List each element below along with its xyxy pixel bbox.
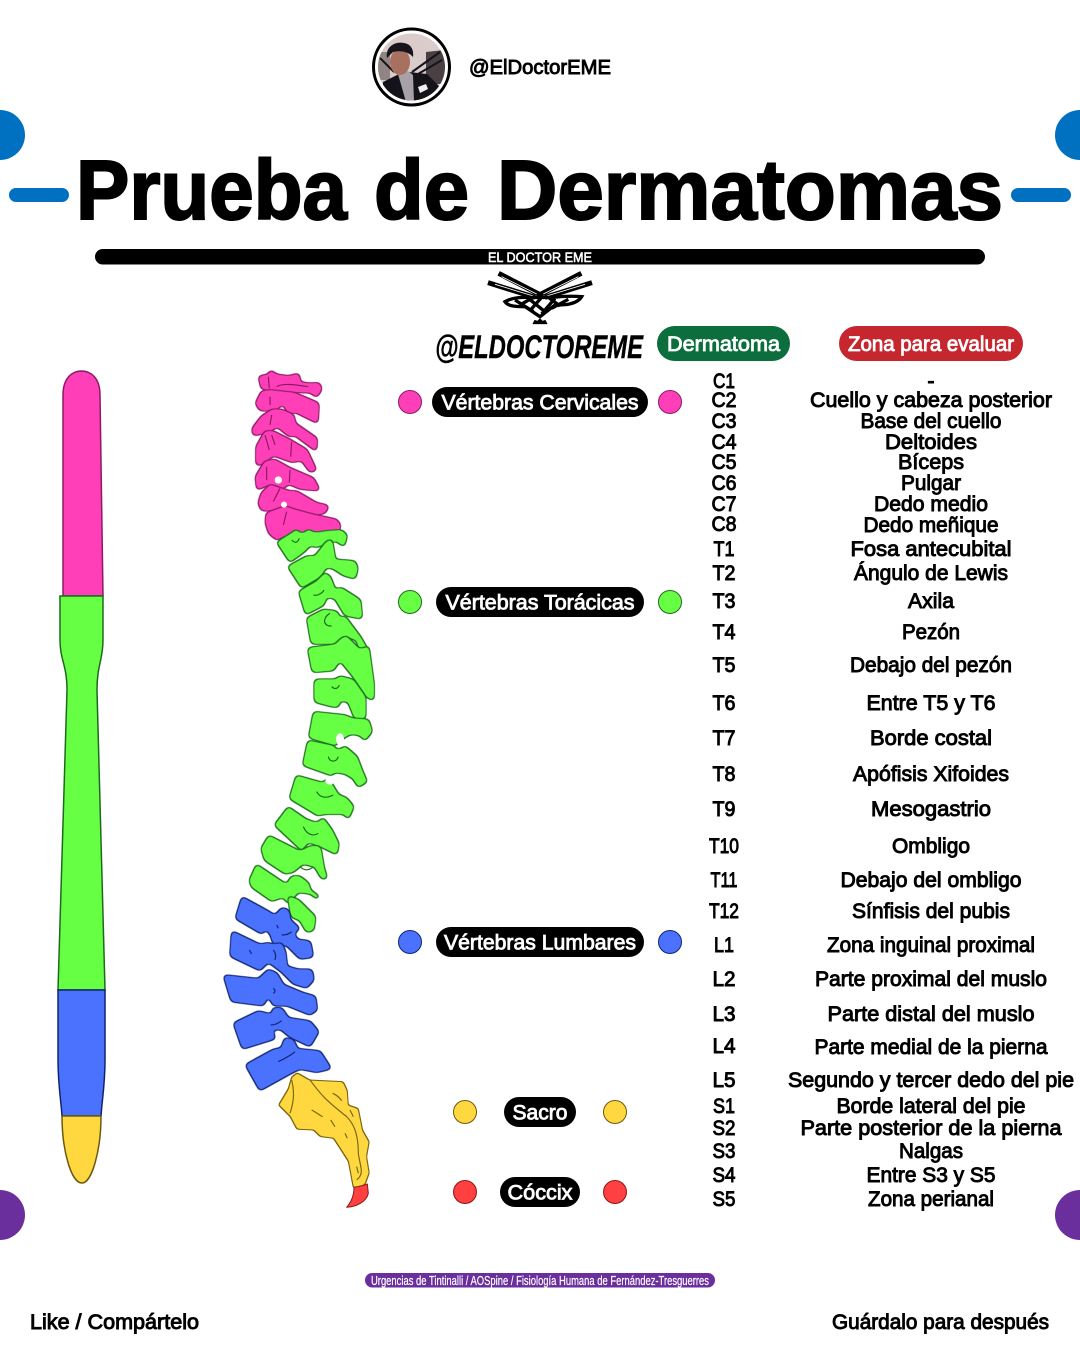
spine illustration (224, 371, 373, 1207)
dermatome levels column: T11 (710, 868, 738, 892)
dermatome levels column: T6 (712, 691, 736, 715)
dermatome levels column (709, 369, 739, 1211)
dermatome levels column: L2 (712, 967, 736, 991)
zones to evaluate column: Parte medial de la pierna (814, 1035, 1048, 1059)
dermatome levels column: C7 (712, 492, 736, 516)
zones to evaluate column: - (927, 369, 935, 393)
zones to evaluate column: Pulgar (901, 471, 961, 495)
dermatome levels column: L3 (712, 1002, 736, 1026)
coccyx (347, 1184, 368, 1207)
dermatome levels column: T9 (712, 797, 736, 821)
references pill: Urgencias de Tintinalli / AOSpine / Fisiología Humana de Fernández-Tresguerres (371, 1273, 709, 1288)
dermatome levels column: T3 (712, 589, 736, 613)
zones to evaluate column: Entre S3 y S5 (866, 1163, 996, 1187)
label: lumbar vertebrae: Vértebras Lumbares (444, 930, 636, 954)
handle: @ElDoctorEME (469, 56, 611, 79)
dermatome levels column: T10 (709, 834, 739, 858)
dermatome levels column: C6 (712, 471, 737, 495)
zones to evaluate column: Dedo medio (874, 492, 988, 516)
label: thoracic vertebrae (398, 587, 682, 617)
dermatome levels column: T12 (709, 899, 739, 923)
zones to evaluate column: Parte proximal del muslo (815, 967, 1047, 991)
title: Prueba (76, 143, 348, 237)
sacrum (278, 1073, 369, 1188)
label: thoracic vertebrae: Vértebras Torácicas (446, 590, 634, 614)
title underline bar with brand name (95, 249, 985, 265)
dermatome levels column: C2 (712, 388, 736, 412)
zones to evaluate column: Mesogastrio (871, 797, 991, 821)
zones to evaluate column: Bíceps (898, 450, 964, 474)
zones to evaluate column: Pezón (902, 620, 960, 644)
dermatome levels column: L4 (712, 1034, 736, 1058)
dermatome levels column: T2 (712, 561, 736, 585)
icon: author avatar (374, 29, 450, 105)
zones to evaluate column: Ángulo de Lewis (854, 560, 1008, 585)
column header: Dermatoma: Dermatoma (667, 332, 780, 356)
title: de (374, 143, 469, 237)
zones to evaluate column: Dedo meñique (864, 513, 998, 537)
zones to evaluate column: Axila (908, 589, 954, 613)
footer: save for later: Guárdalo para después (832, 1310, 1049, 1334)
footer: like and share: Like / Compártelo (30, 1310, 199, 1334)
dermatome levels column: S3 (712, 1139, 736, 1163)
zones to evaluate column: Parte distal del muslo (828, 1002, 1035, 1026)
zones to evaluate column: Debajo del ombligo (840, 868, 1022, 892)
zones to evaluate column: Ombligo (892, 834, 970, 858)
zones to evaluate column: Parte posterior de la pierna (800, 1116, 1062, 1140)
dermatome levels column: T5 (712, 653, 736, 677)
label: cervical vertebrae: Vértebras Cervicales (442, 390, 638, 414)
zones to evaluate column: Entre T5 y T6 (866, 691, 996, 715)
zones to evaluate column: Sínfisis del pubis (852, 899, 1010, 923)
dermatome levels column: C1 (713, 369, 735, 393)
column header: Zona para evaluar (839, 326, 1023, 361)
zones to evaluate column: Cuello y cabeza posterior (810, 388, 1052, 412)
column header: Zona para evaluar: Zona para evaluar (848, 332, 1014, 356)
dermatome levels column: S4 (712, 1163, 736, 1187)
label: sacrum (454, 1097, 626, 1127)
zones to evaluate column: Borde lateral del pie (836, 1094, 1026, 1118)
zones to evaluate column: Zona inguinal proximal (827, 933, 1035, 957)
body spine bar (58, 371, 105, 1183)
dermatome levels column: L5 (712, 1068, 736, 1092)
zones to evaluate column (788, 369, 1074, 1211)
title (76, 143, 1003, 237)
dermatome levels column: C4 (712, 430, 737, 454)
dermatome levels column: L1 (714, 933, 734, 957)
label: coccyx (454, 1177, 626, 1207)
lumbar vertebrae (224, 897, 331, 1090)
icon: winged logo (488, 273, 592, 324)
dermatome levels column: C8 (712, 512, 737, 536)
label: cervical vertebrae (398, 387, 682, 417)
dermatome levels column: S5 (712, 1187, 736, 1211)
zones to evaluate column: Deltoides (885, 430, 977, 454)
zones to evaluate column: Fosa antecubital (850, 537, 1012, 561)
zones to evaluate column: Base del cuello (860, 409, 1002, 433)
upper thoracic vertebrae (277, 530, 368, 655)
zones to evaluate column: Nalgas (899, 1139, 963, 1163)
dermatome levels column: T8 (712, 762, 736, 786)
title: Dermatomas (497, 143, 1003, 237)
label: sacrum: Sacro (512, 1100, 568, 1124)
label: coccyx: Cóccix (508, 1180, 573, 1204)
lower thoracic vertebrae (250, 637, 373, 932)
dermatome levels column: T4 (712, 620, 736, 644)
dermatome levels column: C3 (712, 409, 737, 433)
brush handle logotype: @ELDOCTOREME (435, 329, 644, 365)
zones to evaluate column: Segundo y tercer dedo del pie (788, 1068, 1074, 1092)
title underline bar with brand name: EL DOCTOR EME (488, 250, 592, 265)
column header: Dermatoma (657, 326, 790, 361)
zones to evaluate column: Apófisis Xifoides (853, 762, 1009, 786)
zones to evaluate column: Debajo del pezón (850, 653, 1012, 677)
dermatome levels column: T1 (714, 537, 734, 561)
label: lumbar vertebrae (398, 927, 682, 957)
zones to evaluate column: Borde costal (870, 726, 992, 750)
zones to evaluate column: Zona perianal (868, 1187, 994, 1211)
dermatome levels column: C5 (712, 450, 737, 474)
dermatome levels column: S2 (712, 1116, 736, 1140)
cervical vertebrae (253, 371, 340, 539)
dermatome levels column: S1 (713, 1094, 735, 1118)
dermatome levels column: T7 (712, 726, 736, 750)
